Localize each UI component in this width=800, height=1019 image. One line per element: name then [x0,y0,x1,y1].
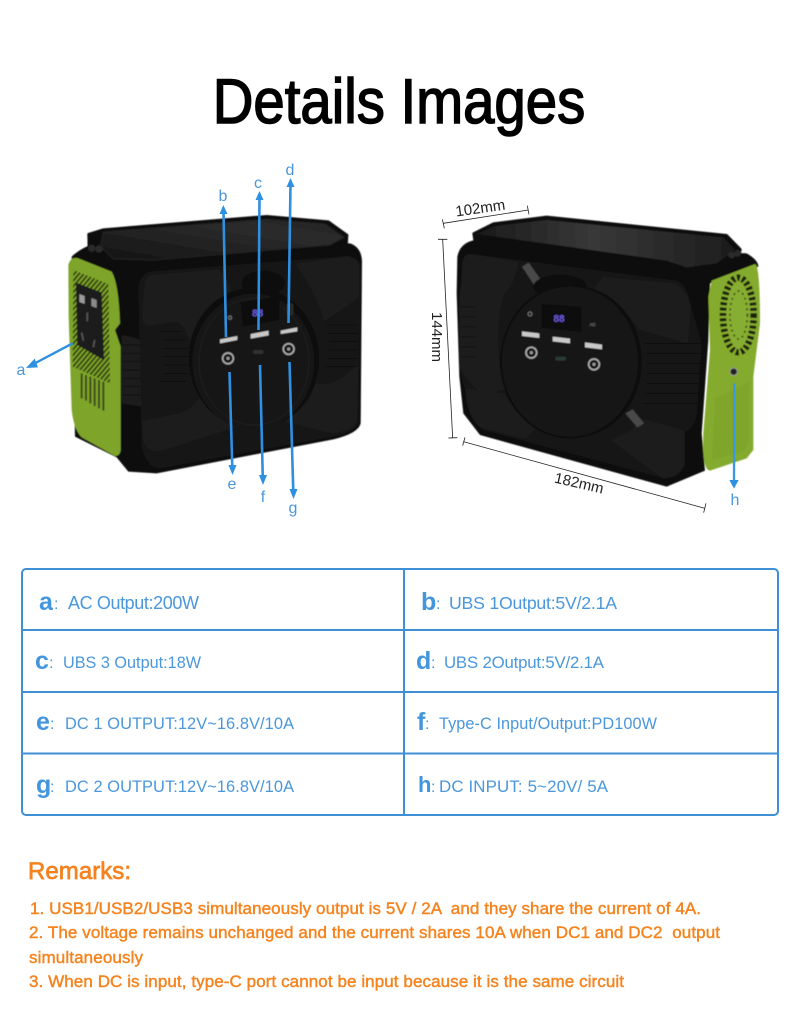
row e: : [50,716,54,733]
remarks list: 2. The voltage remains unchanged and the current shares 10A when DC1 and DC2 output [29,923,720,942]
remarks list: simultaneously [29,948,144,967]
row e: e [36,708,50,736]
USB ports [220,336,237,343]
product photo: front-left view [26,216,362,473]
arrow h [730,383,738,483]
callout labels a to g: d [286,162,294,179]
row d [416,647,605,675]
callout labels a to g: g [289,500,297,517]
callout labels a to g [17,162,297,517]
row a: : [54,596,58,613]
arrow a [32,343,73,365]
row e [36,708,294,736]
fan [723,278,754,352]
row a: AC Output:200W [68,593,199,613]
green side panel [68,258,121,456]
device body: 88 [553,314,565,325]
row c [35,647,202,675]
row d: UBS 2Output:5V/2.1A [444,653,605,672]
table grid [22,569,778,815]
callout labels a to g: e [228,476,237,493]
row a [39,588,199,616]
side ribs [643,343,702,403]
callout labels a to g: a [17,362,26,379]
remarks list [29,899,720,991]
row b: UBS 1Output:5V/2.1A [449,593,617,613]
row c: c [35,647,49,675]
display [542,304,582,332]
DC ports [526,347,537,358]
row f: Type-C Input/Output:PD100W [439,715,658,733]
row c: UBS 3 Output:18W [63,654,202,672]
row b [421,588,617,616]
row f: : [425,716,429,733]
dimension lines [438,206,706,513]
row h [418,772,609,797]
remarks list: 1. USB1/USB2/USB3 simultaneously output is 5V / 2A and they share the current of 4A. [30,899,701,918]
row d: d [416,647,431,675]
row b: b [421,588,436,616]
row a: a [39,588,54,616]
arrowheads b to g [220,178,298,499]
row g: g [36,771,51,799]
device body: AC [590,322,596,327]
row c: : [49,655,53,672]
row d: : [431,655,435,672]
device body [457,217,760,487]
row h: DC INPUT: 5~20V/ 5A [439,777,609,796]
side ribs [122,335,142,407]
row g: DC 2 OUTPUT:12V~16.8V/10A [65,778,294,796]
row e: DC 1 OUTPUT:12V~16.8V/10A [65,715,294,733]
row h: h [418,772,431,797]
callout labels a to g: f [261,489,266,506]
device body: 88 [252,309,264,320]
row f [417,708,658,736]
USB ports [522,331,539,338]
specification table [22,569,778,815]
device body [68,216,362,473]
row g: : [50,779,54,796]
row b: : [436,596,440,613]
display [241,296,279,327]
row g [36,771,294,799]
row h: : [431,779,435,796]
remarks list: 3. When DC is input, type-C port cannot be input because it is the same circuit [29,972,624,991]
callout labels a to g: c [254,175,262,192]
green side panel [703,264,760,471]
product photo: front-right view [438,206,760,513]
title: Details Images [213,66,585,137]
dimension 144mm: 144mm [428,312,445,362]
dimension 102mm: 102mm [454,197,506,220]
callout labels a to g: b [219,188,228,205]
remarks heading: Remarks: [28,858,131,885]
callout arrows b to g [224,184,293,492]
label h: h [731,492,739,509]
row f: f [417,708,426,736]
dimension 182mm: 182mm [553,470,605,498]
DC ports [223,353,233,364]
